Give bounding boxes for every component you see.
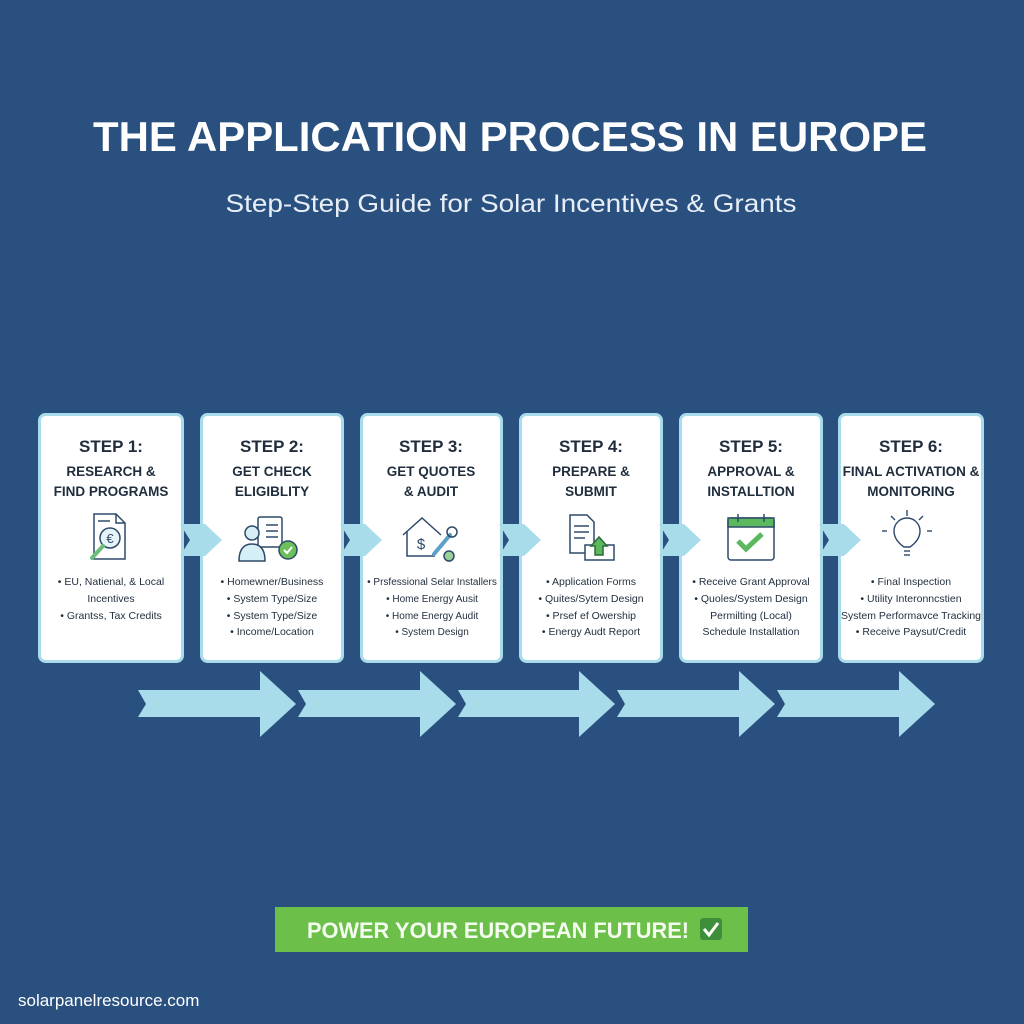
- flow arrows: [138, 671, 935, 737]
- card 6: • Receive Paysut/Credit: [856, 626, 966, 638]
- card 1: Incentives: [87, 593, 135, 605]
- card 5: • Receive Grant Approval: [692, 576, 810, 588]
- card 6: • Utility Interonncstien: [860, 593, 962, 605]
- card 6: STEP 6:: [879, 437, 943, 456]
- card 3: [362, 414, 502, 662]
- icon: house dollar wrench: [403, 518, 457, 561]
- icon: light bulb: [882, 510, 932, 555]
- card 1: [40, 414, 182, 662]
- title: THE APPLICATION PROCESS IN EUROPE: [93, 113, 927, 160]
- card 3: GET QUOTES: [387, 464, 475, 479]
- card 5: Schedule Installation: [703, 626, 800, 638]
- callout button: [275, 907, 748, 952]
- card 6: • Final Inspection: [871, 576, 951, 588]
- card 4: PREPARE &: [552, 464, 630, 479]
- card 2: STEP 2:: [240, 437, 304, 456]
- card 5: APPROVAL &: [707, 464, 795, 479]
- card 1: • EU, Natienal, & Local: [58, 576, 164, 588]
- callout button: POWER YOUR EUROPEAN FUTURE!: [307, 918, 689, 943]
- footer url: solarpanelresource.com: [18, 991, 199, 1010]
- card 1: • Grantss, Tax Credits: [60, 610, 162, 622]
- icon: document magnifier euro: €: [106, 531, 114, 546]
- icon: documents upload: [570, 515, 614, 560]
- connector chevrons between cards: [180, 524, 861, 556]
- card 2: [202, 414, 342, 662]
- card 6: [840, 414, 982, 662]
- card 3: • Prsfessional Selar Installers: [367, 577, 497, 588]
- card 4: [520, 414, 662, 662]
- card 4: STEP 4:: [559, 437, 623, 456]
- card 2: GET CHECK: [232, 464, 312, 479]
- card 3: STEP 3:: [399, 437, 463, 456]
- card 5: STEP 5:: [719, 437, 783, 456]
- icon: document magnifier euro: [92, 514, 125, 559]
- card 5: Permilting (Local): [710, 610, 792, 622]
- card 3: & AUDIT: [404, 484, 459, 499]
- icon: calendar check: [728, 514, 774, 560]
- card 1: FIND PROGRAMS: [54, 484, 168, 499]
- card 4: • Prsef ef Owership: [546, 610, 636, 622]
- card 5: INSTALLTION: [707, 484, 795, 499]
- card 1: RESEARCH &: [66, 464, 156, 479]
- card 4: • Quites/Sytem Design: [538, 593, 644, 605]
- subtitle: Step-Step Guide for Solar Incentives & Grants: [226, 190, 796, 218]
- card 3: • Home Energy Ausit: [386, 594, 478, 605]
- card 2: • Homewner/Business: [221, 576, 323, 588]
- card 3: • Home Energy Audit: [386, 611, 478, 622]
- icon: person clipboard check: [239, 517, 297, 561]
- card 4: SUBMIT: [565, 484, 618, 499]
- card 5: • Quoles/System Design: [694, 593, 808, 605]
- card 5: [680, 414, 822, 662]
- card 4: • Energy Audt Report: [542, 626, 640, 638]
- card 1: STEP 1:: [79, 437, 143, 456]
- icon: house dollar wrench: $: [417, 536, 426, 553]
- card 3: • System Design: [395, 627, 469, 638]
- card 2: • System Type/Size: [227, 593, 317, 605]
- card 2: • System Type/Size: [227, 610, 317, 622]
- card 4: • Application Forms: [546, 576, 636, 588]
- card 6: MONITORING: [867, 484, 955, 499]
- card 2: ELIGIBLITY: [235, 484, 309, 499]
- card 6: System Performavce Tracking: [841, 610, 981, 622]
- card 2: • Income/Location: [230, 626, 314, 638]
- card 6: FINAL ACTIVATION &: [843, 464, 980, 479]
